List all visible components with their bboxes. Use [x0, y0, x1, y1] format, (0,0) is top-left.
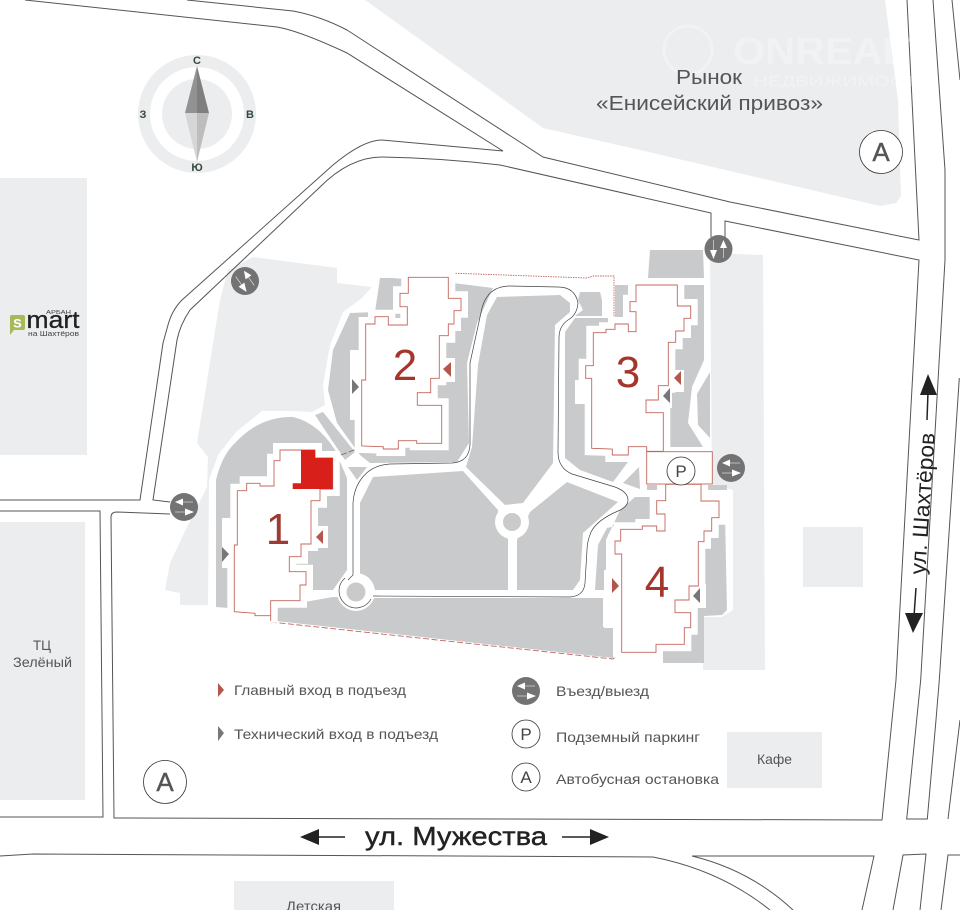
arrow: Muzhestva east	[562, 829, 609, 845]
property boundary	[271, 273, 620, 659]
icon: bus stop market: A	[872, 137, 890, 167]
icon: compass	[140, 55, 254, 174]
label: market: «Енисейский привоз»	[596, 93, 823, 115]
building 2: 2	[393, 341, 417, 390]
icons: technical entrances	[222, 379, 700, 603]
building 3	[575, 285, 691, 455]
label: TC Zeleny: Зелёный	[13, 654, 72, 670]
logo: Smart: на Шахтёров	[28, 329, 79, 338]
legend: Автобусная остановка	[556, 771, 719, 787]
legend	[218, 677, 719, 791]
panel: light area east of buildings	[703, 253, 765, 670]
icon: entry west road	[170, 493, 198, 521]
icon: bus stop market	[860, 130, 902, 174]
arrow: Muzhestva west	[300, 829, 345, 845]
icon: entry north-east	[704, 235, 732, 263]
panel: light area west of buildings	[165, 257, 372, 605]
building 2	[350, 277, 461, 449]
watermark: ONREALT	[733, 31, 930, 73]
icon: bus stop south-west: A	[156, 767, 174, 797]
panel: market area	[365, 0, 901, 206]
logo: Smart: mart	[26, 307, 80, 334]
watermark	[664, 26, 930, 90]
icons: main entrances	[316, 362, 681, 593]
label: TC Zeleny: ТЦ	[33, 637, 52, 653]
icon: entry north-west	[226, 262, 264, 300]
building 3: 3	[616, 348, 640, 397]
panel: unnamed square block	[803, 527, 863, 587]
icon: compass: В	[246, 109, 254, 121]
legend: Главный вход в подъезд	[234, 682, 406, 698]
panel: Smart shopping centre block	[0, 178, 87, 455]
arrow: Shakhtyorov south	[905, 588, 923, 633]
building 1: 1	[266, 505, 290, 554]
logo: Smart	[10, 307, 80, 338]
legend: A	[520, 768, 532, 787]
legend: Въезд/выезд	[556, 683, 649, 699]
label: cafe: Кафе	[757, 751, 792, 767]
underground parking marker	[647, 452, 712, 485]
building 4	[604, 484, 719, 652]
legend: Подземный паркинг	[556, 729, 700, 745]
inner courtyard road line	[348, 286, 628, 597]
arrow: Shakhtyorov north	[920, 374, 937, 420]
building 1	[222, 450, 333, 621]
label: TC Zeleny	[13, 637, 72, 670]
legend: Технический вход в подъезд	[234, 726, 438, 742]
icon: compass: З	[140, 109, 147, 121]
icon: compass: Ю	[191, 162, 203, 174]
roundabout: west	[337, 573, 375, 611]
logo: Smart: АРБАН	[46, 310, 71, 316]
watermark: НЕДВИЖИМОСТЬ	[753, 73, 930, 90]
panel: dark courtyard surfaces	[216, 250, 727, 663]
icon: entry east	[717, 454, 745, 482]
panel: kids block	[234, 881, 394, 910]
street label: Muzhestva: ул. Мужества	[365, 821, 548, 851]
panel: cafe block	[727, 732, 822, 788]
panel: TC Zeleny block	[0, 522, 85, 800]
icon: compass: С	[193, 55, 201, 67]
logo: Smart: s	[13, 314, 22, 332]
icon: bus stop south-west	[144, 760, 186, 804]
underground parking marker: P	[675, 462, 687, 481]
building 4: 4	[645, 558, 669, 607]
legend: P	[520, 725, 532, 744]
roundabout: centre	[495, 505, 529, 539]
label: market: Рынок	[676, 67, 742, 89]
street label: Shakhtyorov: ул. Шахтёров	[905, 432, 940, 575]
label: market	[596, 67, 823, 115]
